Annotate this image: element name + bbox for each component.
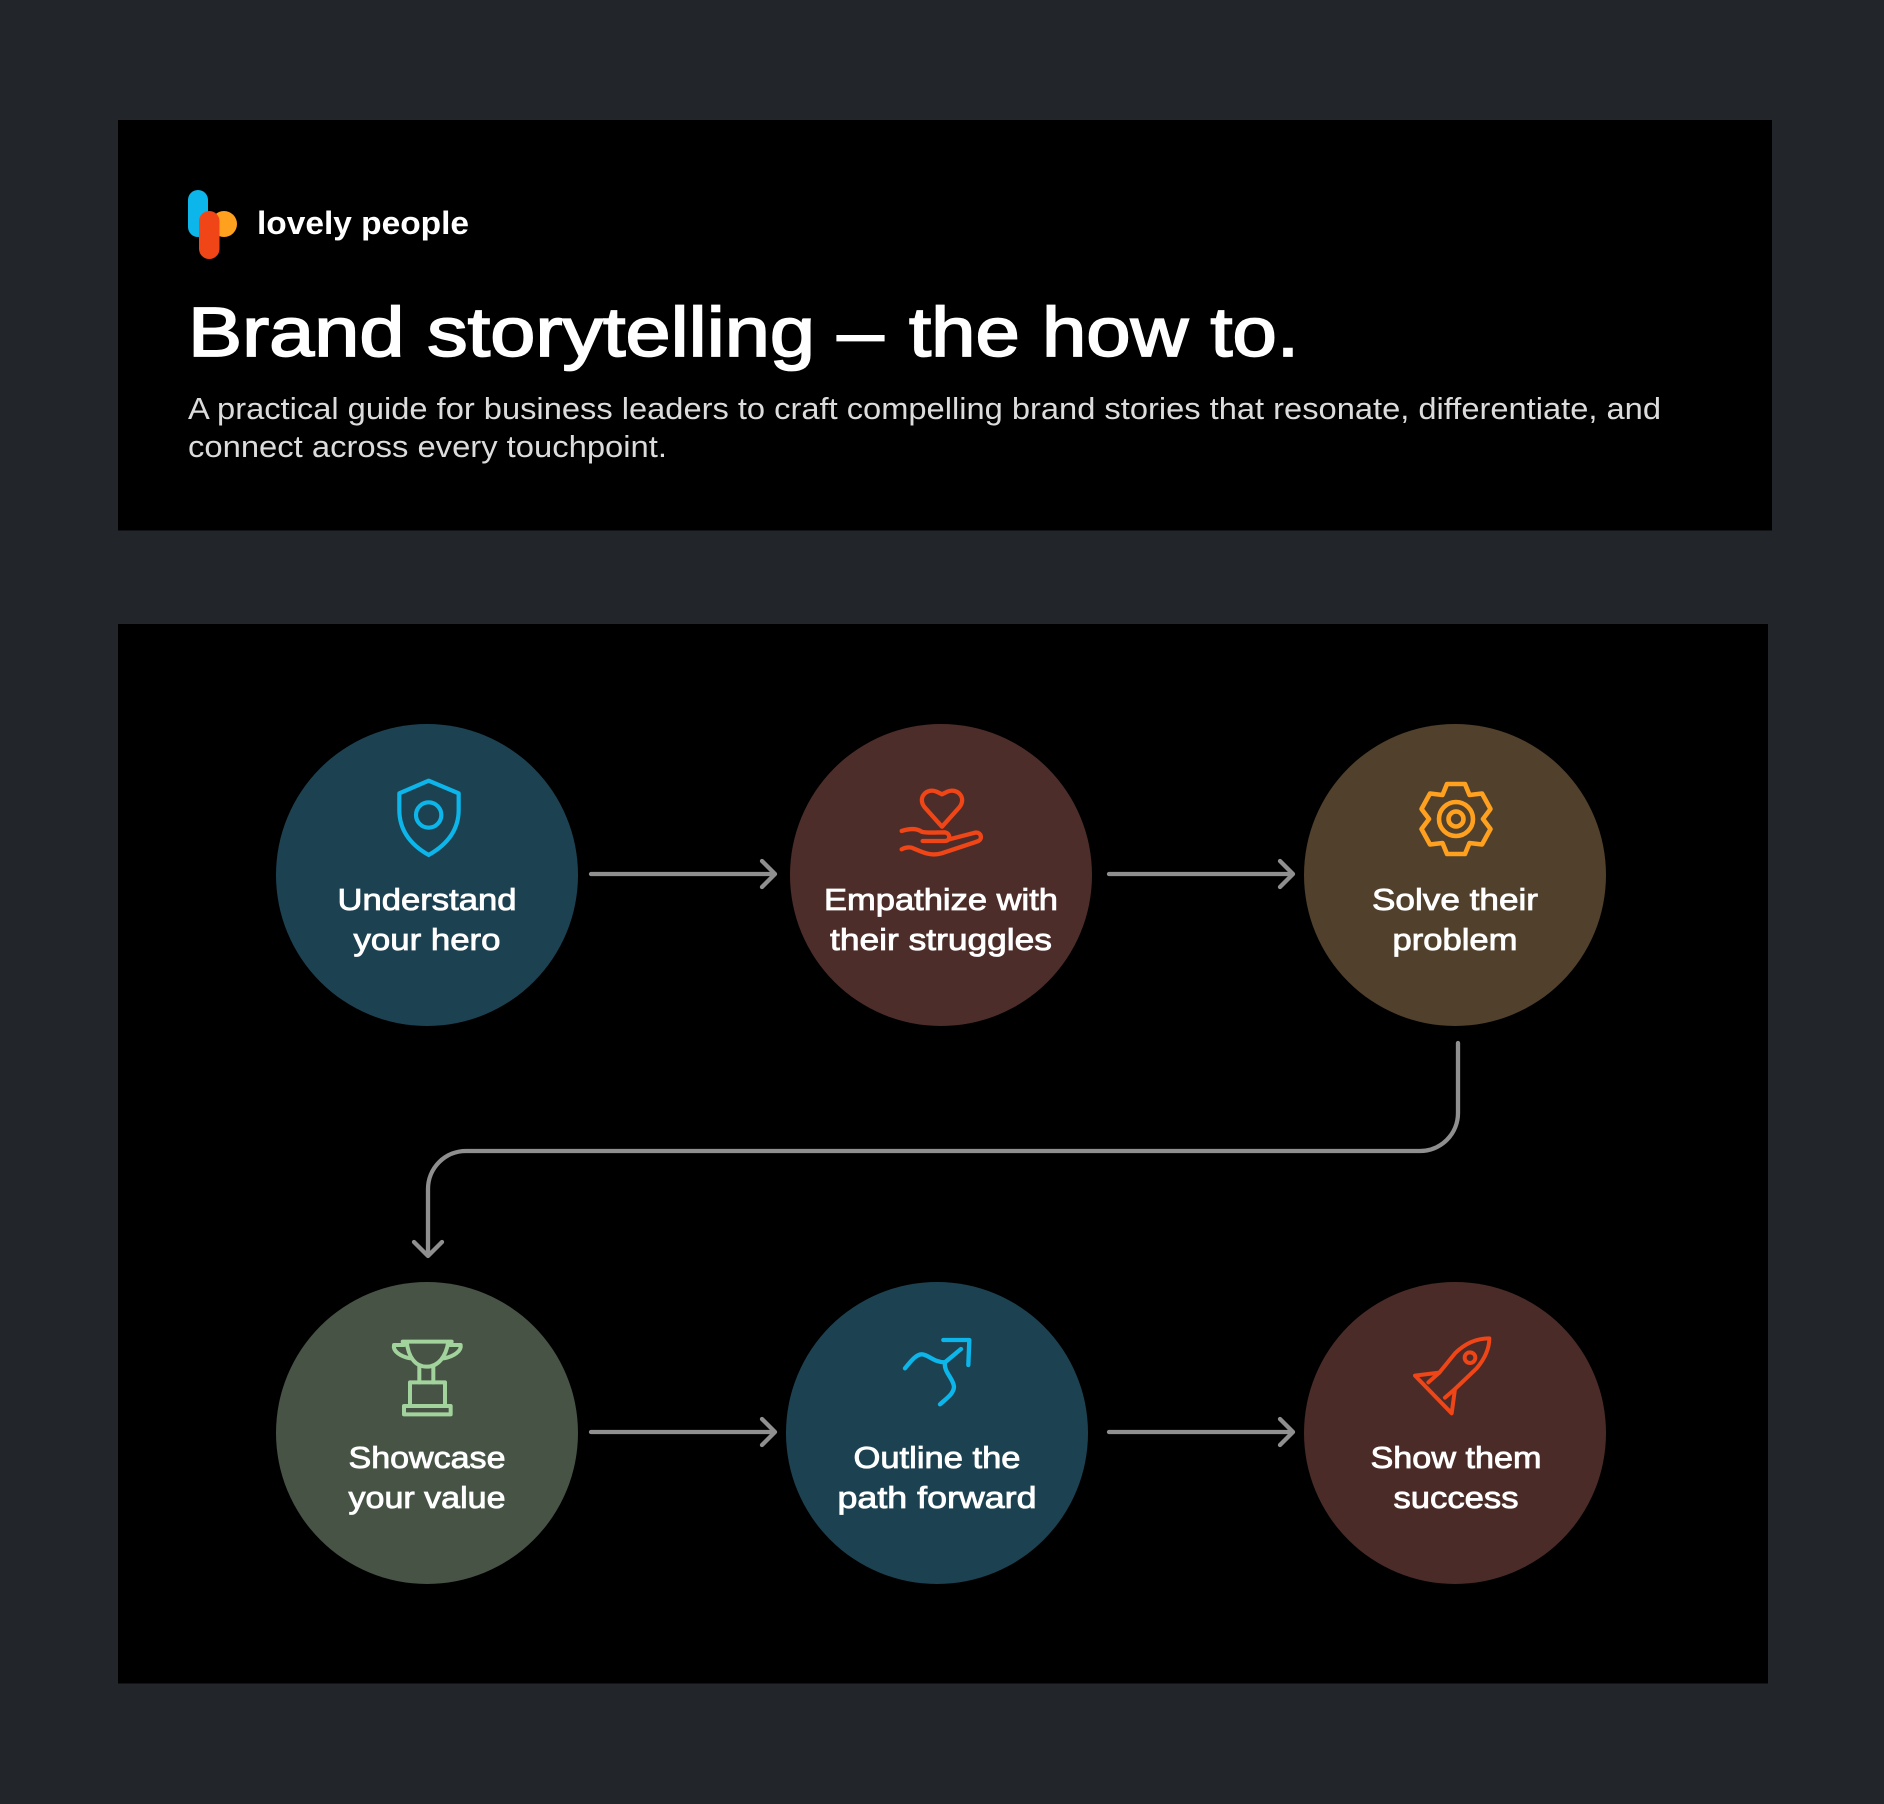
step: understand your hero (276, 724, 578, 1026)
label: your value (348, 1480, 506, 1515)
arrow: connector from row 1 to row 2 (414, 1043, 1458, 1256)
label: Empathize with (824, 882, 1058, 917)
subtitle: A practical guide for business leaders to craft compelling brand stories that resonate, differentiate, and (188, 391, 1661, 426)
subtitle: connect across every touchpoint. (188, 429, 667, 464)
icon: heart in hand (902, 791, 981, 854)
step: solve their problem (1304, 724, 1606, 1026)
label: Show them (1370, 1440, 1542, 1475)
label: Showcase (348, 1440, 506, 1475)
title: — (837, 293, 884, 371)
icon: rocket (1415, 1338, 1489, 1413)
label: your hero (354, 922, 500, 957)
icon: gear (1422, 784, 1490, 854)
title (188, 293, 1299, 371)
label (338, 882, 516, 957)
label: Solve their (1372, 882, 1538, 917)
logo wordmark: lovely people (257, 205, 469, 241)
arrow: step 4 to 5 (591, 1419, 775, 1445)
icon: forking path arrow (905, 1340, 969, 1404)
label (838, 1440, 1036, 1515)
label: Understand (338, 882, 516, 917)
label: success (1394, 1480, 1518, 1515)
label (824, 882, 1058, 957)
label: problem (1392, 922, 1518, 957)
label (348, 1440, 506, 1515)
arrow: step 2 to 3 (1109, 861, 1293, 887)
label: path forward (838, 1480, 1036, 1515)
panel: header (118, 120, 1772, 530)
step: empathize with their struggles (790, 724, 1092, 1026)
title: Brand storytelling (188, 293, 815, 371)
step: outline the path forward (786, 1282, 1088, 1584)
panel: story flow (118, 624, 1768, 1684)
icon: trophy (394, 1342, 461, 1414)
label (1372, 882, 1538, 957)
title: the how to. (909, 293, 1299, 371)
arrow: step 1 to 2 (591, 861, 775, 887)
subtitle (188, 391, 1661, 464)
step: showcase your value (276, 1282, 578, 1584)
label (1370, 1440, 1542, 1515)
icon: logo mark (188, 190, 237, 259)
arrow: step 5 to 6 (1109, 1419, 1293, 1445)
label: their struggles (830, 922, 1052, 957)
icon: shield (399, 781, 459, 855)
step: show them success (1304, 1282, 1606, 1584)
label: Outline the (854, 1440, 1020, 1475)
